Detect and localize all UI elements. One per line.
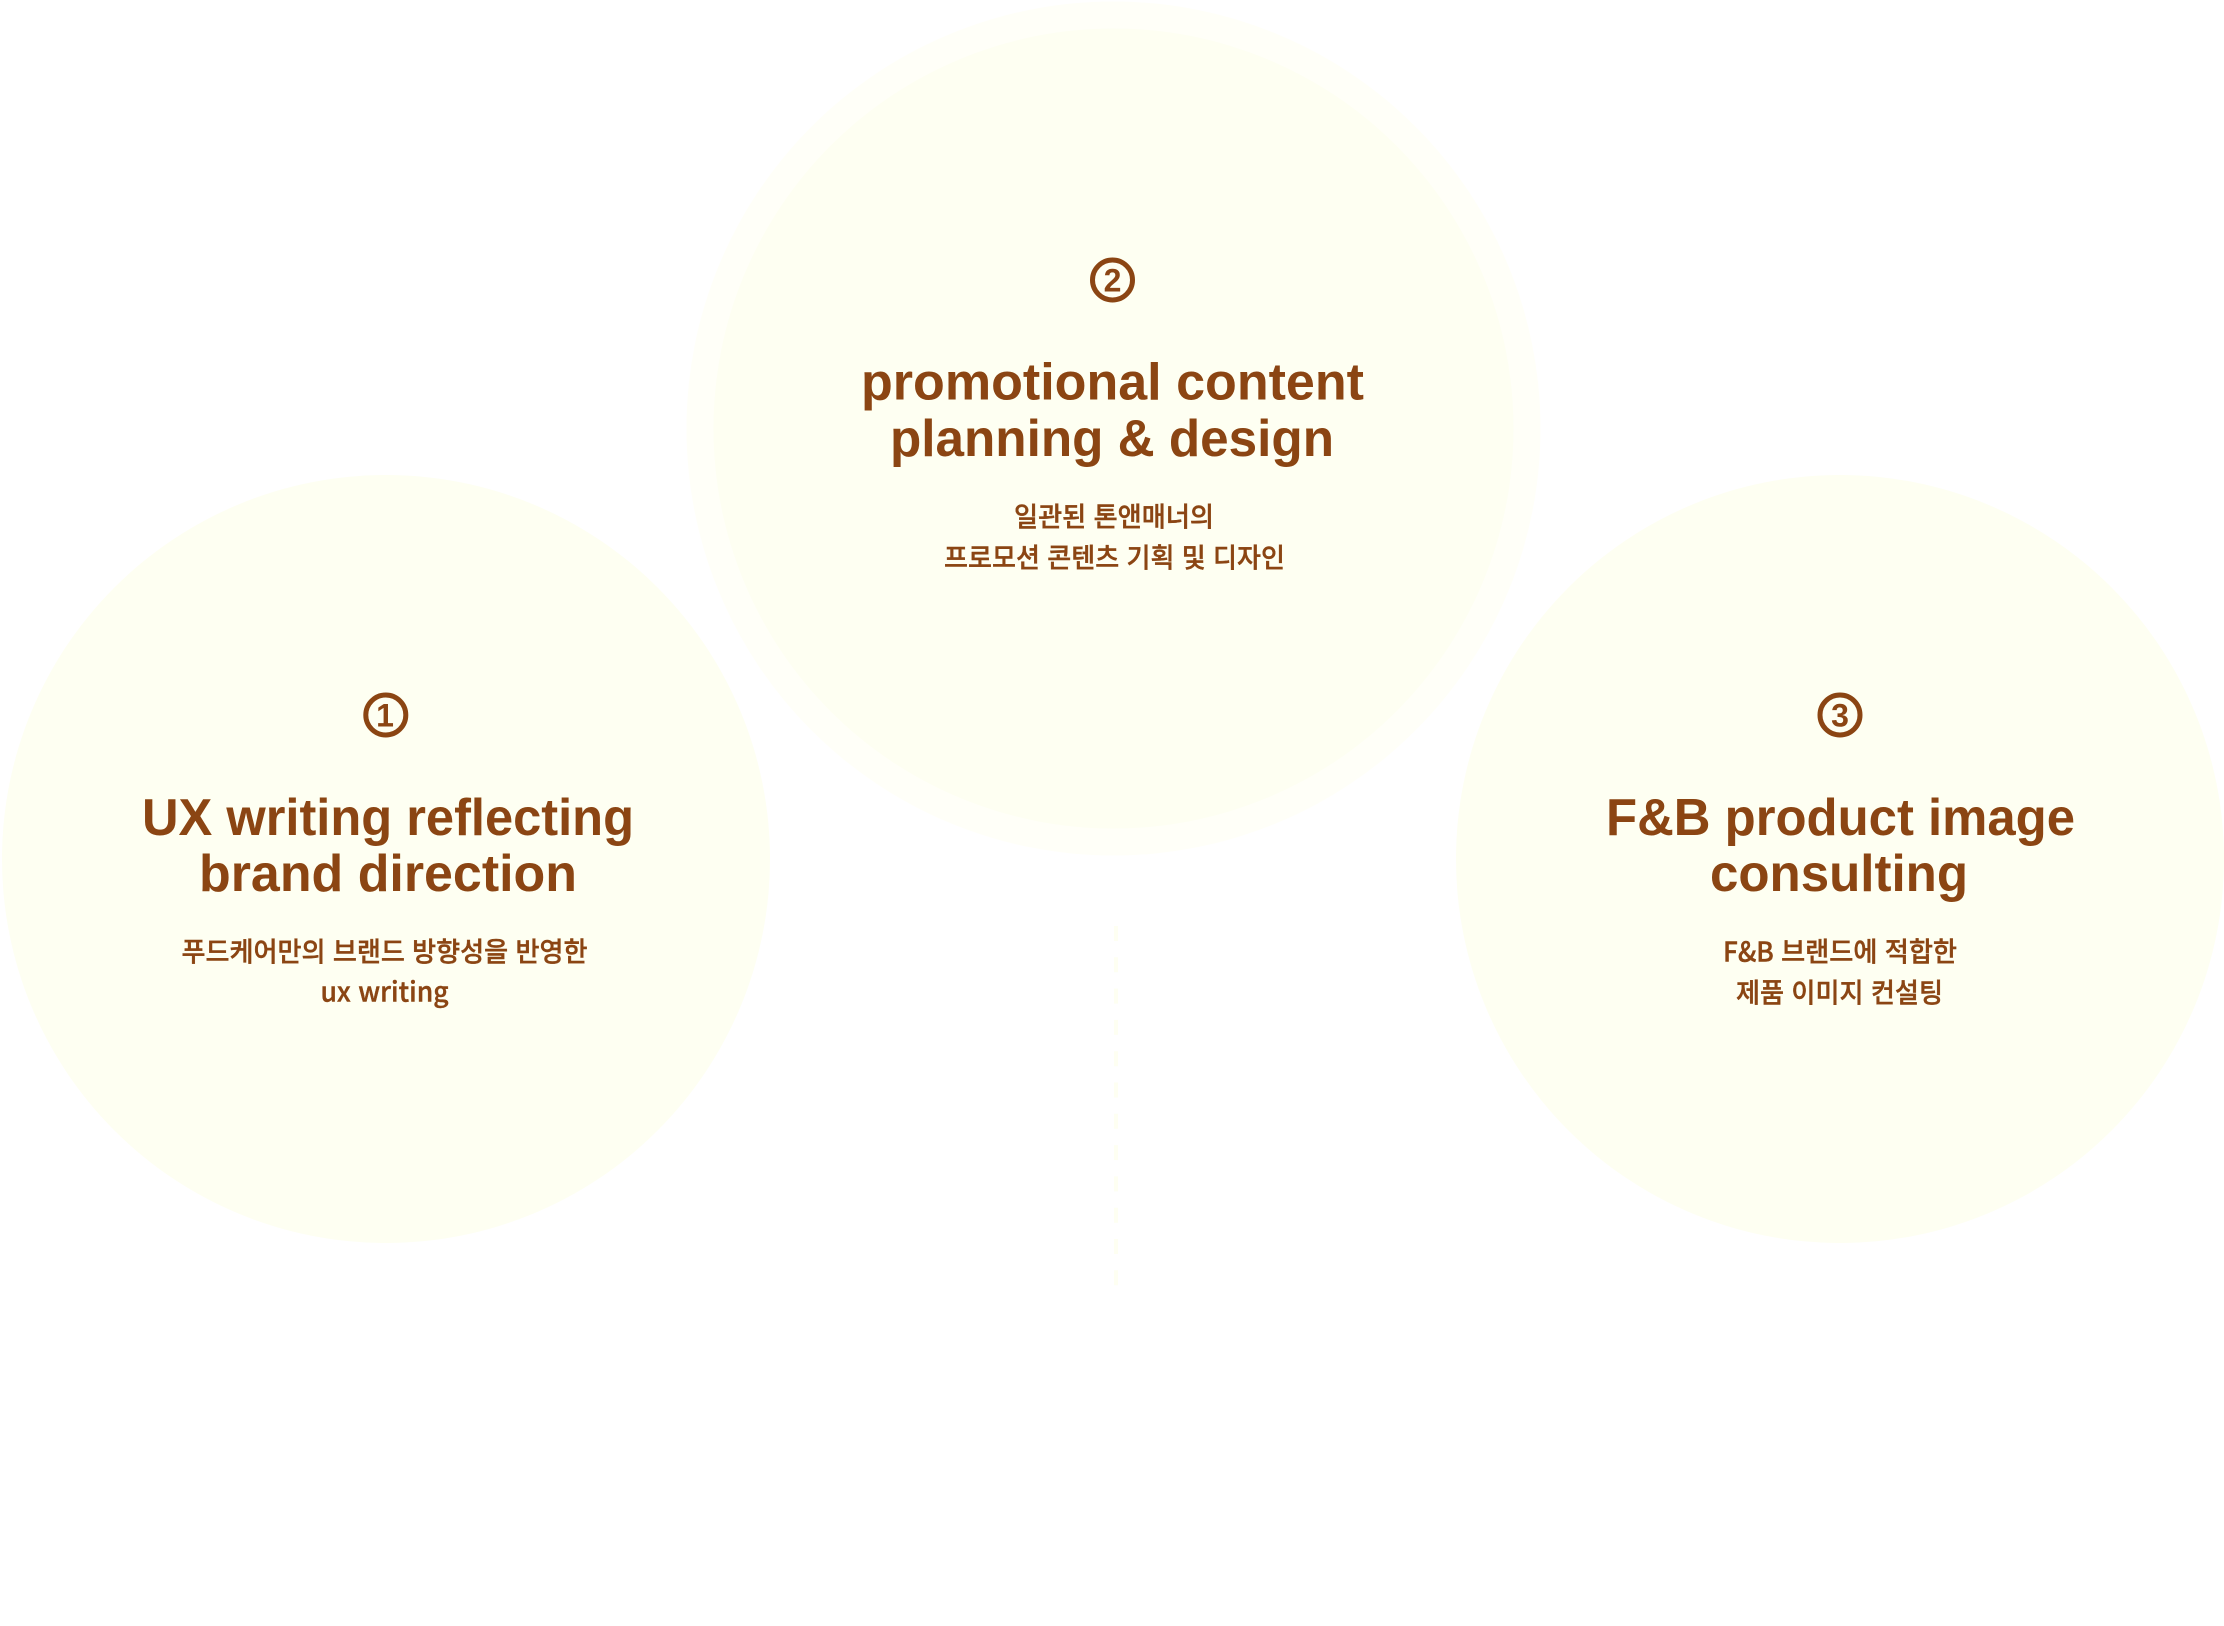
panel: UX writing xyxy=(2,475,770,1243)
description text: 프로모션 콘텐츠 기획 및 디자인 xyxy=(944,536,1285,576)
heading: F&B product image consulting: consulting xyxy=(1710,845,1968,903)
description text: 푸드케어만의 브랜드 방향성을 반영한 xyxy=(182,930,588,970)
icon: number 1 xyxy=(366,695,406,735)
circle halo xyxy=(686,2,1540,856)
description text xyxy=(182,930,588,1010)
heading: UX writing reflecting brand direction xyxy=(142,789,634,903)
heading: promotional content planning & design xyxy=(861,354,1364,468)
circle background xyxy=(1456,475,2224,1243)
heading: UX writing reflecting brand direction: UX writing reflecting xyxy=(142,789,634,847)
panel: promotional content xyxy=(686,2,1540,856)
description text: 일관된 톤앤매너의 xyxy=(1014,496,1214,534)
dashed connector line xyxy=(1114,926,1118,1290)
icon: number 3: 3 xyxy=(1831,698,1849,734)
description text xyxy=(1723,930,1957,1010)
icon: number 2 xyxy=(1092,260,1132,300)
heading: UX writing reflecting brand direction: brand direction xyxy=(199,845,577,903)
panel: F&B product image consulting xyxy=(1456,475,2224,1243)
heading: promotional content planning & design: promotional content xyxy=(861,354,1364,412)
icon: number 1: 1 xyxy=(376,698,394,734)
description text xyxy=(944,496,1285,576)
circle background xyxy=(714,28,1514,828)
heading: F&B product image consulting: F&B product image xyxy=(1606,789,2075,847)
icon: number 2: 2 xyxy=(1104,262,1121,298)
description text: 제품 이미지 컨설팅 xyxy=(1736,972,1943,1010)
description text: F&B 브랜드에 적합한 xyxy=(1723,930,1957,970)
heading: F&B product image consulting xyxy=(1606,789,2075,903)
heading: promotional content planning & design: planning & design xyxy=(890,410,1334,468)
circle background xyxy=(2,475,770,1243)
icon: number 3 xyxy=(1820,695,1860,735)
description text: ux writing xyxy=(320,970,449,1010)
